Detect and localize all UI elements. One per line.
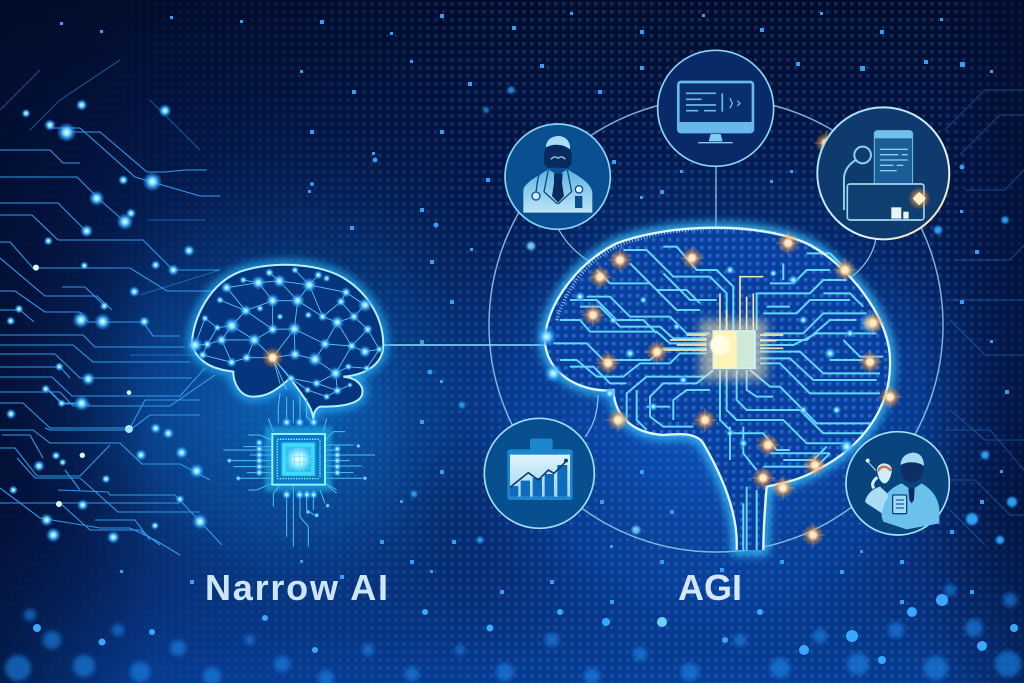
icon: two professionals [846,432,949,535]
orbit ring [489,98,943,552]
Narrow AI chip [223,393,375,547]
icon: phone and card [817,107,949,239]
label: Narrow AI: Narrow AI [205,567,388,608]
bottom bokeh lights [5,584,1021,683]
AGI brain [537,228,890,550]
AGI sparkles [581,131,902,547]
label: AGI: AGI [678,567,742,608]
left circuit traces [0,60,222,555]
right faint circuits [940,90,1024,545]
left circuit nodes [6,99,208,544]
connection line between brains [383,344,548,346]
Narrow AI brain [187,265,384,420]
AGI central chip [700,320,767,380]
icon: doctor [505,124,610,229]
icon: monitor [658,50,774,166]
icon: briefcase chart [484,418,594,528]
